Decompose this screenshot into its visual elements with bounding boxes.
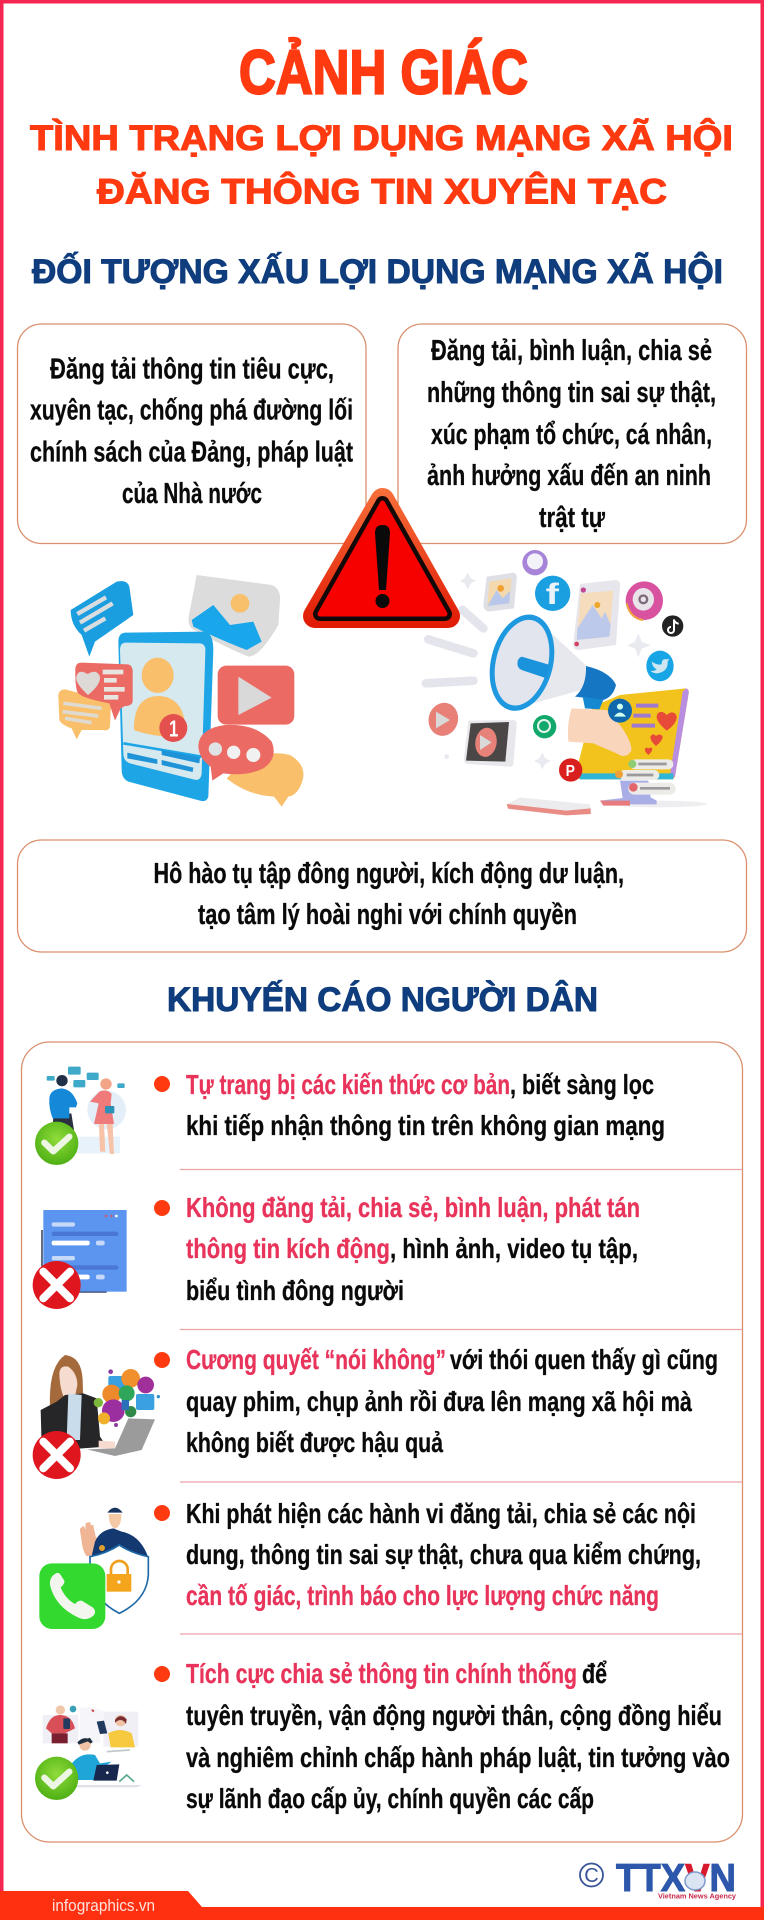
icon: people sharing with check xyxy=(35,1705,142,1800)
panel: bottom text box: tạo tâm lý hoài nghi với chính quyền xyxy=(198,899,577,931)
logo: TTXVN: C xyxy=(584,1865,599,1887)
item 2: , hình ảnh, video tụ tập, xyxy=(390,1233,638,1264)
panel: left text box: của Nhà nước xyxy=(122,478,262,510)
item 3 xyxy=(154,1344,718,1458)
panel: bottom text box xyxy=(18,840,746,952)
icon: web page with cross xyxy=(33,1210,127,1309)
logo: TTXVN: TTXVN xyxy=(616,1857,736,1900)
item 1: , biết sàng lọc xyxy=(510,1069,654,1100)
icon: woman with laptop and cross xyxy=(33,1355,160,1479)
item 5: sự lãnh đạo cấp ủy, chính quyền các cấp xyxy=(186,1783,594,1814)
title: ĐĂNG THÔNG TIN XUYÊN TẠC xyxy=(97,172,667,212)
item 5: Tích cực chia sẻ thông tin chính thống xyxy=(186,1658,577,1689)
title xyxy=(30,38,733,212)
panel: bottom text box: Hô hào tụ tập đông người, kích động dư luận, xyxy=(154,858,624,890)
item 4 xyxy=(154,1498,701,1611)
footer bar xyxy=(0,1891,764,1920)
footer bar: infographics.vn xyxy=(52,1896,155,1915)
item 5: để xyxy=(582,1658,607,1689)
item 3: không biết được hậu quả xyxy=(186,1427,443,1458)
panel: left text box: Đăng tải thông tin tiêu cực, xyxy=(50,354,334,386)
icon: warning triangle xyxy=(315,500,448,616)
panel: recommendations xyxy=(22,1042,742,1842)
panel: left text box: xuyên tạc, chống phá đường lối xyxy=(30,394,353,426)
illustration: megaphone and social media: P xyxy=(566,763,575,780)
panel: right text box: trật tự xyxy=(539,502,605,534)
item 1 xyxy=(154,1069,665,1141)
illustration: megaphone and social media: f xyxy=(546,578,559,611)
item 2: thông tin kích động xyxy=(186,1233,390,1264)
heading: khuyến cáo: KHUYẾN CÁO NGƯỜI DÂN xyxy=(167,981,598,1019)
logo: TTXVN: Vietnam News Agency xyxy=(658,1892,737,1900)
panel: left text box xyxy=(18,324,366,544)
heading: đối tượng xấu: ĐỐI TƯỢNG XẤU LỢI DỤNG MẠNG XÃ HỘI xyxy=(32,252,723,291)
item 1: Tự trang bị các kiến thức cơ bản xyxy=(186,1069,510,1100)
illustration: social media phone: 1 xyxy=(169,716,178,742)
title: CẢNH GIÁC xyxy=(239,38,528,108)
illustration: megaphone and social media xyxy=(425,550,707,815)
title: TÌNH TRẠNG LỢI DỤNG MẠNG XÃ HỘI xyxy=(30,118,733,158)
panel: right text box xyxy=(398,324,746,544)
icon: police and phone xyxy=(39,1508,148,1629)
panel: left text box: chính sách của Đảng, pháp luật xyxy=(30,436,353,468)
item 3: Cương quyết “nói không” xyxy=(186,1344,446,1375)
item 2: Không đăng tải, chia sẻ, bình luận, phát tán xyxy=(186,1192,640,1223)
illustration: social media phone xyxy=(58,575,303,807)
item 2: biểu tình đông người xyxy=(186,1275,404,1306)
item 5 xyxy=(154,1658,730,1814)
icon: people talking with check xyxy=(35,1067,126,1165)
item 2 xyxy=(154,1192,640,1306)
